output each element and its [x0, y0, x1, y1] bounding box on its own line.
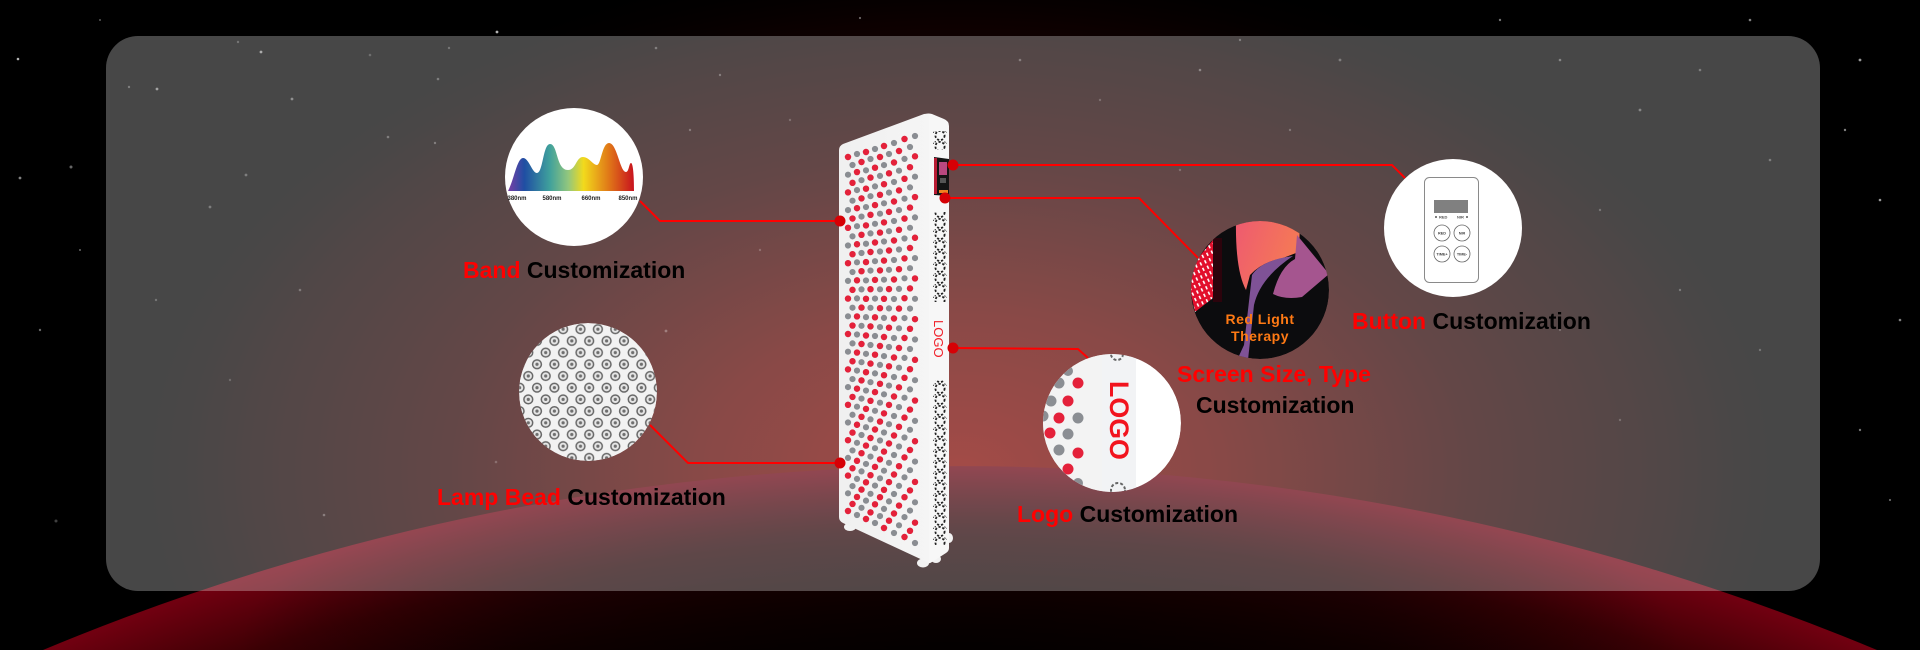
device logo: LOGO	[931, 320, 946, 358]
label: button: Button Customization	[1352, 308, 1591, 334]
side vents	[933, 131, 947, 545]
connector: band	[640, 165, 1405, 463]
screen text: Therapy	[1231, 328, 1289, 344]
remote outline	[1424, 178, 1478, 282]
remote button labels: NIR	[1459, 232, 1466, 236]
label: lamp bead: Lamp Bead Customization	[437, 484, 726, 510]
grey LEDs	[848, 136, 915, 544]
closeup logo text: LOGO	[1104, 381, 1134, 460]
planet horizon	[43, 466, 1877, 650]
remote indicators: RED	[1439, 215, 1448, 220]
spectrum chart	[508, 143, 634, 191]
label: screen: Screen Size, Type	[1177, 361, 1371, 387]
circle: lamp bead	[519, 323, 657, 461]
panel: translucent card	[106, 36, 1820, 591]
connector dots	[834, 160, 958, 468]
connector: lamp bead	[650, 425, 840, 463]
remote button labels: TIME+	[1436, 252, 1448, 256]
label: band: Band Customization	[463, 257, 685, 283]
remote indicators	[1435, 215, 1468, 220]
connector: screen	[945, 198, 1198, 258]
label: screen second line: Customization	[1196, 392, 1354, 418]
circle: band spectrum	[505, 108, 643, 246]
circle: logo closeup	[1043, 354, 1181, 492]
remote display	[1434, 200, 1468, 213]
figure	[1236, 218, 1300, 290]
spectrum axis labels: 850nm	[618, 196, 638, 202]
red panel in photo	[1191, 240, 1213, 312]
closeup vents	[1110, 482, 1126, 492]
product: LED panel device	[839, 114, 953, 568]
label: logo: Logo Customization	[1017, 501, 1238, 527]
connector: button	[953, 165, 1405, 178]
spectrum axis labels: 380nm	[507, 196, 527, 202]
spectrum axis labels	[507, 196, 638, 202]
device front face	[839, 114, 929, 563]
spectrum axis labels: 660nm	[581, 196, 601, 202]
remote buttons	[1434, 225, 1470, 262]
stars	[17, 17, 1901, 523]
red LEDs	[848, 139, 915, 544]
remote button labels	[1436, 232, 1468, 256]
device feet	[844, 523, 953, 568]
circle: screen	[1188, 218, 1329, 360]
LEDs closeup	[1043, 368, 1084, 486]
remote button labels: RED	[1438, 232, 1446, 236]
connector: logo	[953, 348, 1088, 358]
device screen	[934, 157, 949, 196]
screen text: Red Light	[1225, 311, 1295, 327]
planet centre shading	[324, 470, 1596, 650]
screen text	[1226, 314, 1294, 344]
device side face	[926, 114, 949, 563]
circle: button remote	[1384, 159, 1522, 297]
remote indicators: NIR	[1457, 215, 1464, 220]
spectrum axis labels: 580nm	[542, 196, 562, 202]
remote button labels: TIME-	[1457, 252, 1468, 256]
